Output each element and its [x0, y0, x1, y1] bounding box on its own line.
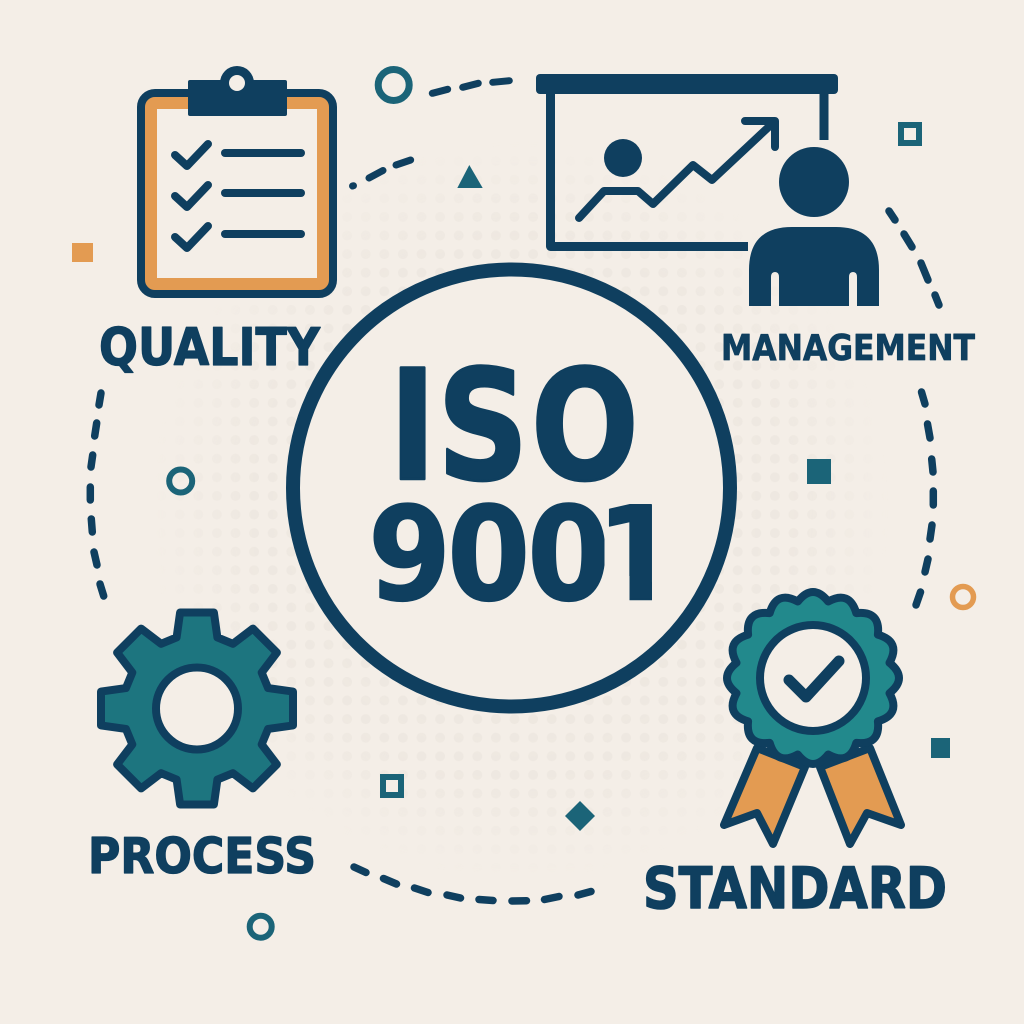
dashed orbit: bottom [354, 867, 591, 901]
decorative square: orange [72, 243, 93, 262]
icon: clipboard checklist [141, 66, 333, 294]
decorative ring: bottom [250, 916, 272, 938]
label: MANAGEMENT: MANAGEMENT [721, 328, 975, 369]
decorative square: right [807, 459, 831, 484]
decorative square: lower right [931, 738, 950, 758]
decorative triangle [457, 165, 483, 188]
dashed orbit: upper right [889, 211, 939, 305]
label: PROCESS: PROCESS [88, 828, 316, 885]
decorative ring: top [378, 70, 409, 100]
dashed orbit: right [916, 392, 933, 605]
dashed orbit: upper left [352, 160, 411, 186]
decorative square outline: top right [901, 125, 919, 143]
decorative ring: left [169, 470, 192, 492]
title: 9001: 9001 [368, 480, 679, 631]
icon: award rosette [724, 592, 901, 844]
central ISO 9001 badge [293, 270, 730, 706]
label: QUALITY: QUALITY [99, 318, 321, 378]
decorative square outline: bottom [383, 777, 401, 795]
decorative diamond [565, 801, 595, 831]
icon: presenter with growth chart [536, 74, 879, 306]
label: STANDARD: STANDARD [643, 856, 947, 922]
icon: gear [101, 612, 293, 804]
dashed orbit: top [432, 81, 509, 93]
decorative ring: orange [952, 586, 974, 608]
dashed orbit: left [90, 393, 104, 596]
infographic canvas [72, 66, 976, 941]
title: ISO: ISO [389, 339, 639, 516]
